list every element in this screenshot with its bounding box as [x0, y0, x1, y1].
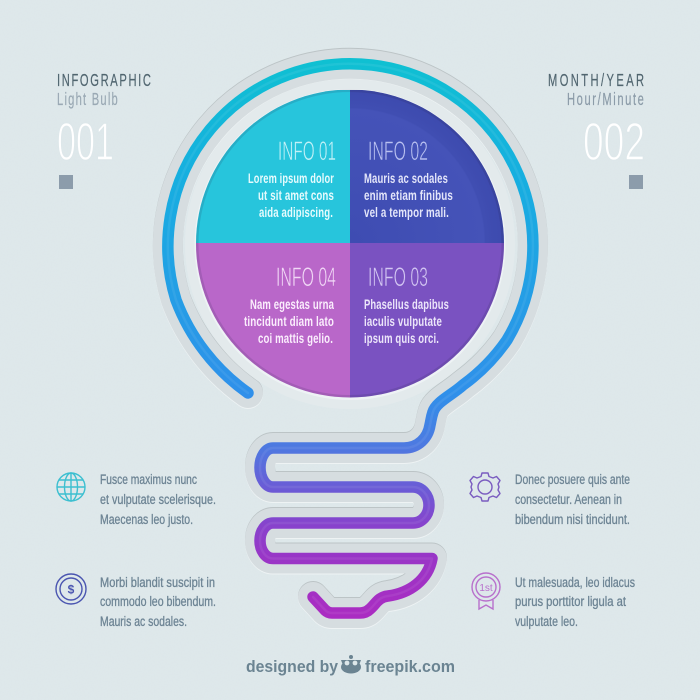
- icon: dollar coin: $: [68, 582, 75, 596]
- header: right: MONTH/YEAR: [548, 70, 644, 91]
- header: left: 001: [57, 112, 114, 172]
- header: left: Light Bulb: [57, 89, 118, 110]
- text: medal note: vulputate leo.: [515, 614, 578, 629]
- quadrant: info 01: INFO 01: [278, 136, 336, 166]
- text: gear note: consectetur. Aenean in: [515, 492, 622, 507]
- text: medal note: purus porttitor ligula at: [515, 594, 626, 609]
- quadrant: info 03: ipsum quis orci.: [364, 330, 439, 346]
- text: coin note: Morbi blandit suscipit in: [100, 575, 215, 590]
- header: right: [548, 70, 645, 189]
- icon: medal: [472, 573, 500, 609]
- text: gear note: bibendum nisi tincidunt.: [515, 512, 630, 527]
- credit: [246, 655, 455, 676]
- icon: globe: [57, 473, 85, 501]
- quadrant: info 03: iaculis vulputate: [364, 313, 442, 329]
- quadrant: info 01: [248, 136, 336, 220]
- credit: designed by: [246, 657, 339, 676]
- quadrant: info 02: vel a tempor mali.: [364, 204, 449, 220]
- quadrant: info 03: INFO 03: [368, 262, 428, 292]
- icon: dollar coin: [56, 574, 86, 604]
- icon: freepik mascot: [341, 655, 361, 674]
- header: right: 002: [583, 112, 645, 172]
- quadrant: info 02: INFO 02: [368, 136, 428, 166]
- text: coin note: [100, 575, 216, 629]
- text: gear note: Donec posuere quis ante: [515, 472, 630, 487]
- quadrant colours: [196, 90, 504, 398]
- quadrant: info 01: ut sit amet cons: [258, 187, 334, 203]
- text: medal note: [515, 575, 635, 629]
- quadrant: info 02: Mauris ac sodales: [364, 170, 448, 186]
- header: left: INFOGRAPHIC: [57, 70, 151, 91]
- text: gear note: [515, 472, 630, 527]
- icon: medal: 1st: [479, 583, 493, 594]
- quadrant: info 04: tincidunt diam lato: [244, 313, 334, 329]
- quadrant: info 03: Phasellus dapibus: [364, 296, 449, 312]
- quadrant: info 02: enim etiam finibus: [364, 187, 453, 203]
- text: coin note: Mauris ac sodales.: [100, 614, 187, 629]
- icon: gear: [470, 473, 500, 501]
- light bulb groove and neon line: [168, 63, 533, 614]
- text: medal note: Ut malesuada, leo idlacus: [515, 575, 635, 590]
- quadrant: info 01: aida adipiscing.: [259, 204, 333, 220]
- quadrant: info 04: INFO 04: [276, 262, 336, 292]
- text: globe note: et vulputate scelerisque.: [100, 492, 216, 507]
- header: right: Hour/Minute: [567, 89, 644, 110]
- infographic canvas: [55, 48, 644, 676]
- header: left: [57, 70, 151, 189]
- text: coin note: commodo leo bibendum.: [100, 594, 216, 609]
- quadrant: info 01: Lorem ipsum dolor: [248, 170, 334, 186]
- quadrant: info 04: coi mattis gelio.: [258, 330, 333, 346]
- text: globe note: Fusce maximus nunc: [100, 472, 197, 487]
- quadrant: info 04: Nam egestas urna: [250, 296, 334, 312]
- quadrant: info 04: [244, 262, 336, 346]
- quadrant: info 03: [364, 262, 449, 346]
- info disc: [185, 79, 515, 409]
- text: globe note: [100, 472, 216, 527]
- credit: freepik.com: [365, 657, 455, 676]
- quadrant: info 02: [364, 136, 453, 220]
- text: globe note: Maecenas leo justo.: [100, 512, 193, 527]
